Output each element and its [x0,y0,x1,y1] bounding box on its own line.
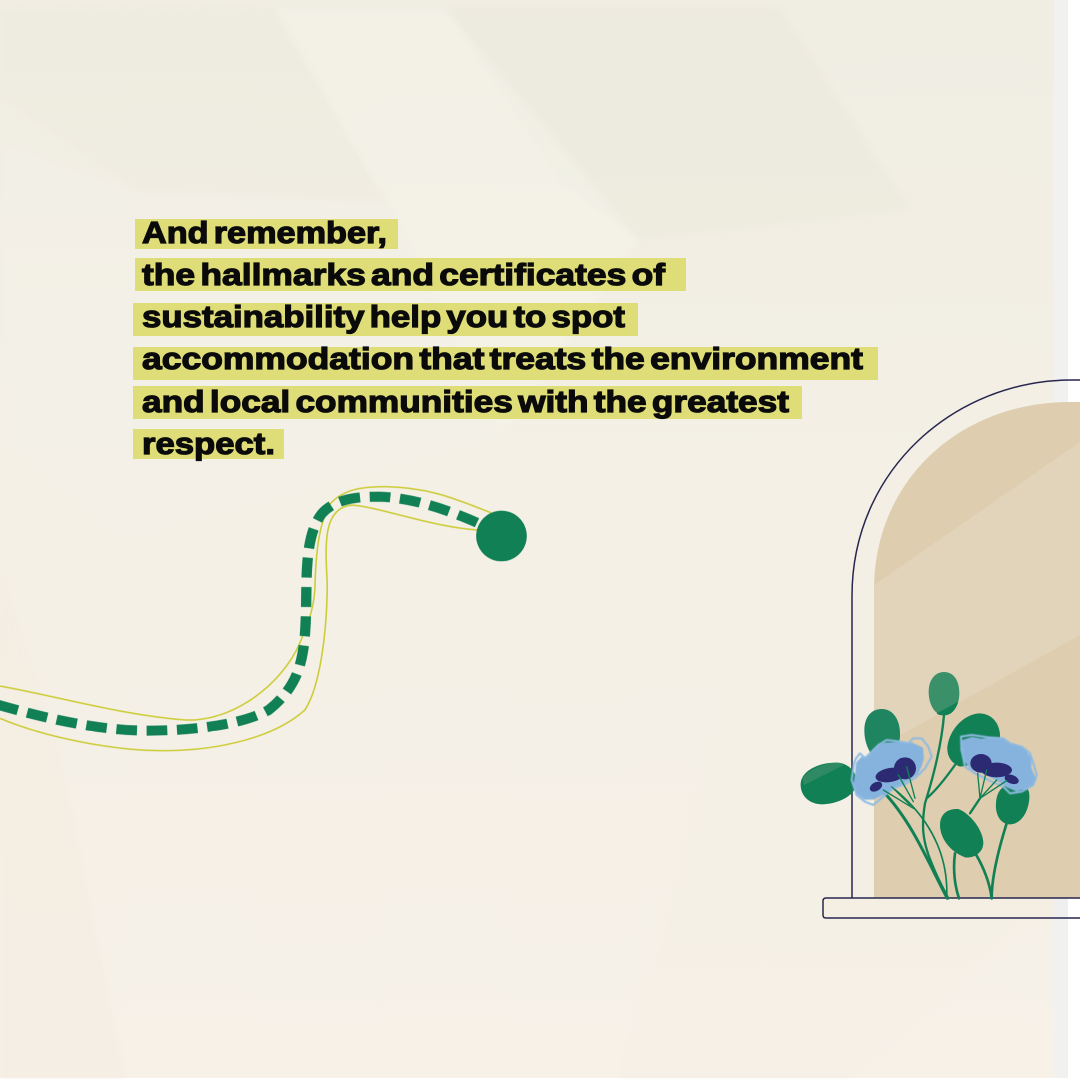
path outline: upper [0,487,491,720]
highlight: line 2 [135,258,686,291]
text: line 1: And remember, [142,215,387,250]
leaf: right dark [947,713,1000,767]
flower: left [852,738,932,808]
arch window [852,380,1080,898]
highlight: line 4 [133,347,878,380]
flower stems: right [978,770,1007,798]
leaf: upper left [864,709,900,755]
text: line 3: sustainability help you to spot [142,299,625,334]
plant stems [883,715,1007,898]
flower: right [961,735,1037,798]
highlight: line 5 [133,386,802,419]
dashed route [0,497,477,731]
highlight: line 3 [133,303,638,336]
text: line 5: and local communities with the greatest [142,384,789,419]
highlight: line 1 [135,219,398,249]
plant [801,672,1037,898]
flower stems: left [883,767,915,808]
headline [133,215,878,461]
text: line 2: the hallmarks and certificates of [142,257,666,292]
leaf: top [929,672,959,715]
highlight: line 6 [133,429,284,459]
leaf: bottom [940,809,983,857]
path outline: lower [0,505,477,751]
text: line 6: respect. [142,426,275,461]
winding path [0,487,527,751]
text: line 4: accommodation that treats the environment [142,341,863,376]
route end dot [476,511,527,561]
leaf: left [801,763,857,804]
window sill [823,898,1080,918]
leaf: lower right [996,783,1029,824]
